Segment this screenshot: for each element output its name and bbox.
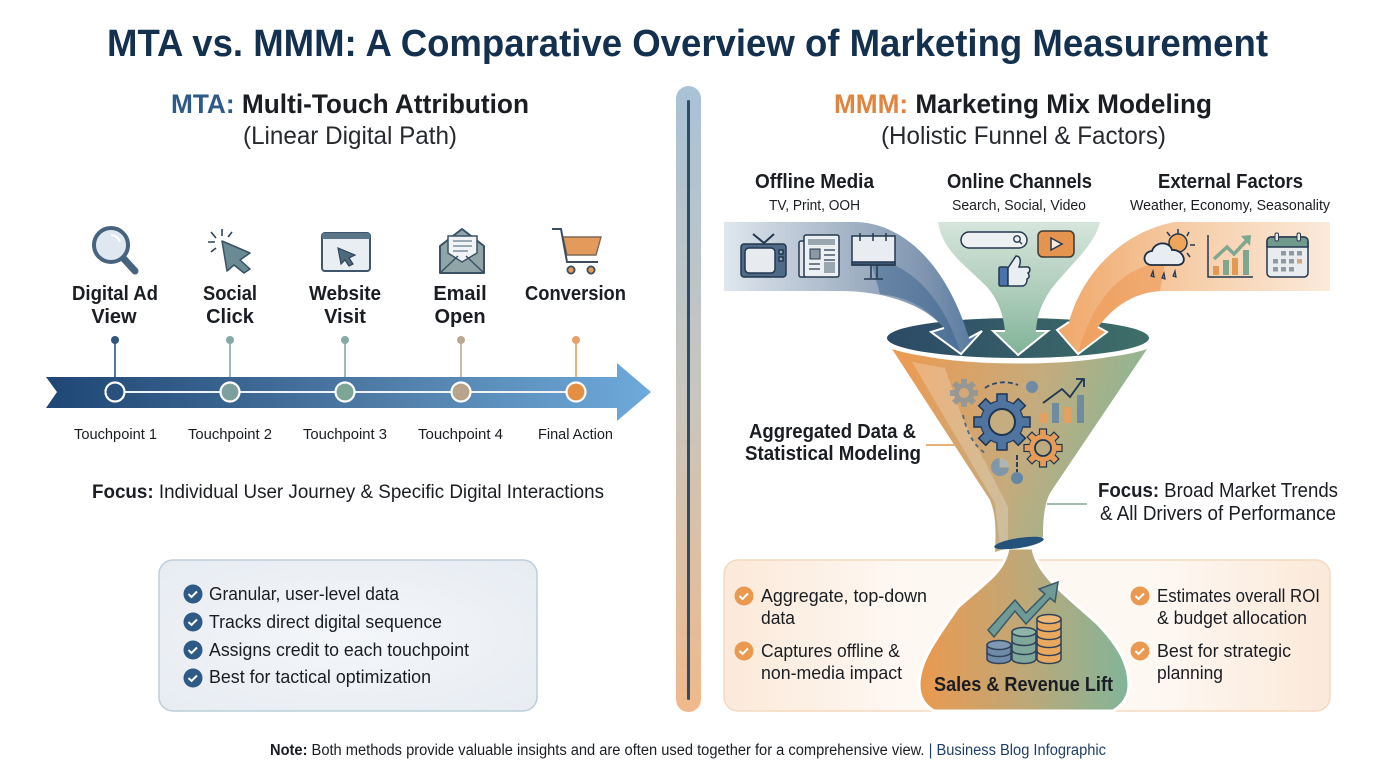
heading: MMM: (Holistic Funnel & Factors) bbox=[881, 122, 1166, 150]
heading: MMM bbox=[834, 89, 1212, 150]
left check list: Captures offline & bbox=[761, 640, 901, 661]
icon: billboard bbox=[852, 233, 895, 279]
funnel body bbox=[892, 349, 1147, 552]
sales and revenue drop bbox=[919, 548, 1129, 711]
flow: offline media bbox=[724, 222, 982, 354]
icon: shopping cart bbox=[552, 229, 601, 274]
icon: thumbs up bbox=[999, 256, 1030, 286]
labels: touchpoint names: View bbox=[91, 306, 137, 328]
icon: email envelope bbox=[440, 229, 484, 273]
icon: search bar bbox=[961, 232, 1027, 248]
labels: touchpoint names: Email bbox=[433, 283, 487, 305]
panel: MTA characteristics bbox=[159, 560, 537, 711]
title: MTA vs. MMM: A Comparative Overview of Marketing Measurement bbox=[107, 23, 1268, 65]
funnel highlight bbox=[912, 362, 1008, 547]
labels: touchpoint names: Open bbox=[434, 306, 486, 328]
left check list bbox=[734, 585, 927, 683]
icon: calendar bbox=[1267, 233, 1308, 277]
labels: touchpoint steps: Touchpoint 3 bbox=[303, 426, 387, 443]
heading: MTA bbox=[171, 89, 529, 150]
labels: touchpoint names: Digital Ad bbox=[72, 283, 158, 305]
icon: TV bbox=[741, 234, 786, 277]
labels: touchpoint steps: Final Action bbox=[538, 426, 613, 443]
input headings: External Factors bbox=[1158, 171, 1303, 193]
labels: touchpoint steps: Touchpoint 4 bbox=[418, 426, 503, 443]
icon: weather bbox=[1144, 229, 1195, 279]
icon: coins and growth arrow bbox=[987, 582, 1061, 664]
heading: MTA: (Linear Digital Path) bbox=[243, 122, 457, 150]
footer note: Note: Both methods provide valuable insights and are often used together for a comprehensive view. | Business Blog Infographic bbox=[270, 742, 1106, 759]
icon: analytics gears and chart bbox=[950, 379, 1084, 484]
panel: MMM characteristics bbox=[724, 560, 1330, 711]
timeline: MTA digital path bbox=[46, 228, 651, 443]
right check list: Best for strategic bbox=[1157, 640, 1291, 661]
right check list: Estimates overall ROI bbox=[1157, 585, 1320, 606]
callout: MMM focus: Focus: Broad Market Trends bbox=[1098, 480, 1338, 502]
flow: online channels bbox=[938, 222, 1100, 355]
labels: touchpoint names: Social bbox=[203, 283, 257, 305]
icon: newspaper bbox=[799, 235, 839, 277]
check list: Assigns credit to each touchpoint bbox=[209, 639, 469, 660]
input headings: Search, Social, Video bbox=[952, 197, 1086, 214]
check list: Best for tactical optimization bbox=[209, 666, 431, 687]
text: MTA focus: Focus: Individual User Journey & Specific Digital Interactions bbox=[92, 481, 604, 503]
icon: growth chart bbox=[1208, 235, 1253, 277]
labels: touchpoint steps: Touchpoint 1 bbox=[74, 426, 157, 443]
callout: aggregated data: Statistical Modeling bbox=[745, 443, 921, 465]
funnel bbox=[887, 318, 1149, 552]
callout: MMM focus: & All Drivers of Performance bbox=[1100, 503, 1336, 525]
callout: MMM focus bbox=[1047, 480, 1338, 525]
icon: video play bbox=[1038, 231, 1074, 257]
input headings: Offline Media bbox=[755, 171, 875, 193]
check list: Granular, user-level data bbox=[209, 583, 400, 604]
check list bbox=[184, 583, 469, 688]
flow: external factors bbox=[1057, 222, 1330, 354]
right check list bbox=[1130, 585, 1320, 683]
input headings: TV, Print, OOH bbox=[769, 197, 860, 214]
icon: website window bbox=[322, 233, 370, 271]
center divider bbox=[676, 86, 701, 712]
heading: MTA: MTA: Multi-Touch Attribution bbox=[171, 89, 529, 119]
labels: touchpoint names: Website bbox=[309, 283, 381, 305]
pins and nodes bbox=[106, 336, 586, 402]
left check list: data bbox=[761, 607, 796, 628]
icon: magnifier bbox=[94, 228, 135, 271]
labels: touchpoint steps bbox=[74, 426, 613, 443]
icon: cursor click bbox=[208, 229, 250, 273]
labels: touchpoint names: Conversion bbox=[525, 283, 626, 305]
input headings: Weather, Economy, Seasonality bbox=[1130, 197, 1330, 214]
labels: touchpoint names: Visit bbox=[324, 306, 366, 328]
callout: aggregated data: Aggregated Data & bbox=[749, 421, 916, 443]
left check list: Aggregate, top-down bbox=[761, 585, 927, 606]
labels: touchpoint names: Click bbox=[206, 306, 255, 328]
heading: MMM: MMM: Marketing Mix Modeling bbox=[834, 89, 1212, 119]
callout: aggregated data bbox=[745, 421, 955, 465]
input headings bbox=[755, 171, 1330, 214]
spout opening bbox=[994, 534, 1044, 552]
timeline arrow bbox=[46, 363, 651, 421]
right check list: planning bbox=[1157, 662, 1223, 683]
labels: touchpoint names bbox=[72, 283, 626, 328]
label: sales and revenue lift: Sales & Revenue Lift bbox=[934, 674, 1113, 696]
right check list: & budget allocation bbox=[1157, 607, 1307, 628]
funnel rim bbox=[889, 340, 1149, 361]
check list: Tracks direct digital sequence bbox=[209, 611, 442, 632]
left check list: non-media impact bbox=[761, 662, 902, 683]
labels: touchpoint steps: Touchpoint 2 bbox=[188, 426, 272, 443]
input headings: Online Channels bbox=[947, 171, 1092, 193]
